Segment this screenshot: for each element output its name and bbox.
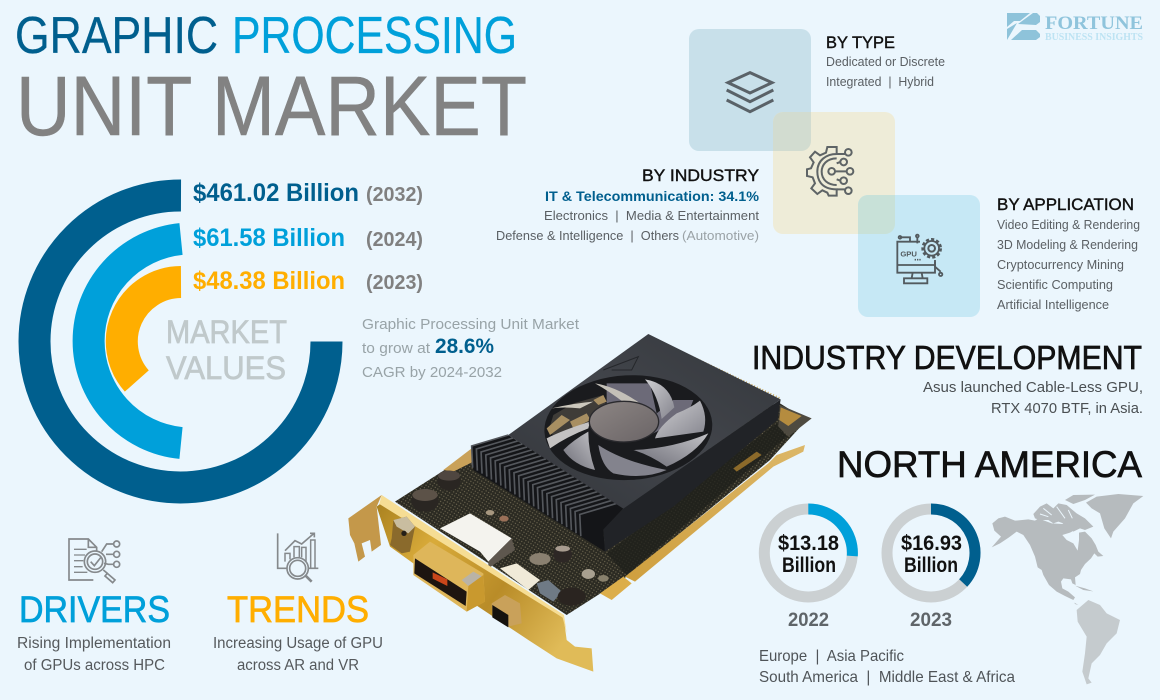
title: UNIT MARKET: [16, 59, 527, 153]
icon: GPU monitor with gear: GPU: [900, 249, 917, 258]
text: trends: across AR and VR: [237, 657, 359, 674]
ring: 2023 value: [122, 282, 181, 381]
text: by type: Integrated | Hybrid: [826, 74, 934, 89]
market value labels: $461.02 Billion: [193, 179, 359, 207]
market value labels: (2023): [366, 272, 423, 294]
text: by application: [997, 195, 1140, 312]
silver shield: [440, 513, 512, 562]
card PCB: [395, 403, 807, 615]
capacitors: [411, 471, 609, 606]
text: by application: Scientific Computing: [997, 277, 1113, 292]
market value labels: [193, 179, 423, 295]
chart center label: MARKET: [166, 314, 287, 350]
gold contact pins: [653, 339, 780, 399]
fan: [542, 371, 715, 484]
segmentation squares: [689, 29, 980, 317]
text: by industry: BY INDUSTRY: [642, 166, 759, 185]
title: GRAPHIC: [15, 7, 218, 65]
illustration: graphics card: [348, 334, 812, 672]
chart: market values concentric rings: [35, 195, 327, 487]
text: by industry: Electronics | Media & Entertainment: [544, 208, 759, 223]
text: by application: Cryptocurrency Mining: [997, 257, 1124, 272]
text: trends: TRENDS: [227, 589, 369, 630]
text: other regions: South America | Middle East & Africa: [759, 669, 1015, 686]
market value labels: (2024): [366, 229, 423, 251]
text: drivers: [17, 589, 171, 674]
text: by application: Artificial Intelligence: [997, 297, 1109, 312]
ring: 2032 value: [35, 195, 327, 487]
cooler top: [508, 334, 781, 509]
CAGR text block: 28.6%: [435, 335, 494, 358]
heatsink fins: [472, 435, 623, 552]
ring: 2024 value: [89, 239, 181, 443]
DVI connector: [413, 542, 485, 612]
text: by application: Video Editing & Rendering: [997, 217, 1140, 232]
logo: Fortune Business Insights: FORTUNE: [1045, 13, 1143, 34]
donut: 2022: $13.18: [778, 532, 839, 555]
text: by application: BY APPLICATION: [997, 195, 1134, 214]
text: industry development: RTX 4070 BTF, in Asia.: [991, 400, 1143, 417]
fan blades: [547, 379, 708, 476]
secondary port: [492, 595, 522, 627]
logo: Fortune Business Insights: BUSINESS INSIGHTS: [1045, 32, 1143, 43]
text: by application: 3D Modeling & Rendering: [997, 237, 1138, 252]
text: drivers: DRIVERS: [19, 589, 170, 630]
text: drivers: of GPUs across HPC: [24, 657, 165, 674]
icon: drivers document magnifier: [69, 539, 120, 583]
text: industry development: Asus launched Cable-Less GPU,: [923, 379, 1143, 396]
text: by industry: [496, 166, 760, 243]
map: Americas: [992, 494, 1143, 684]
title: [15, 7, 527, 153]
CAGR text block: [362, 316, 580, 381]
logo: Fortune Business Insights: [1007, 13, 1143, 43]
text: by industry: (Automotive): [682, 228, 759, 243]
market value labels: $61.58 Billion: [193, 224, 345, 252]
donut: 2023: $16.93: [901, 532, 962, 555]
rear tab: [778, 405, 812, 437]
text: by type: Dedicated or Discrete: [826, 54, 945, 69]
donut: 2023: [887, 509, 975, 631]
donut: 2023: 2023: [910, 610, 952, 631]
CAGR text block: CAGR by 2024-2032: [362, 364, 502, 381]
chart center label: [166, 314, 287, 386]
text: by type: [826, 33, 945, 89]
text: other regions: [759, 648, 1015, 686]
mounting bracket: [348, 495, 593, 672]
market value labels: (2032): [366, 184, 423, 206]
icon: gear with circuit nodes: [807, 147, 853, 196]
icon: layers: [727, 73, 773, 112]
chart center label: VALUES: [166, 350, 286, 386]
heading: north america: NORTH AMERICA: [837, 444, 1142, 485]
text: other regions: Europe | Asia Pacific: [759, 648, 904, 665]
cooler side: [603, 399, 781, 552]
text: by industry: IT & Telecommunication: 34.1%: [545, 188, 760, 204]
gold corner near cooler: [443, 448, 473, 472]
market value labels: $48.38 Billion: [193, 267, 345, 295]
text: by industry: Defense & Intelligence | Others: [496, 228, 679, 243]
icon: GPU monitor with gear: [897, 235, 942, 283]
title: PROCESSING: [232, 7, 517, 65]
icon: trends chart magnifier: [278, 533, 318, 582]
edge connector: [600, 445, 805, 600]
text: trends: [213, 589, 383, 674]
text: by type: BY TYPE: [826, 33, 895, 52]
text: industry development: [752, 339, 1143, 417]
text: trends: Increasing Usage of GPU: [213, 635, 383, 652]
donut: 2022: 2022: [788, 610, 829, 631]
text: drivers: Rising Implementation: [17, 635, 171, 652]
donut: 2022: [764, 509, 852, 631]
donut: 2023: Billion: [904, 554, 958, 577]
CAGR text block: to grow at: [362, 340, 431, 357]
donut: 2022: Billion: [782, 554, 836, 577]
CAGR text block: Graphic Processing Unit Market: [362, 316, 580, 333]
